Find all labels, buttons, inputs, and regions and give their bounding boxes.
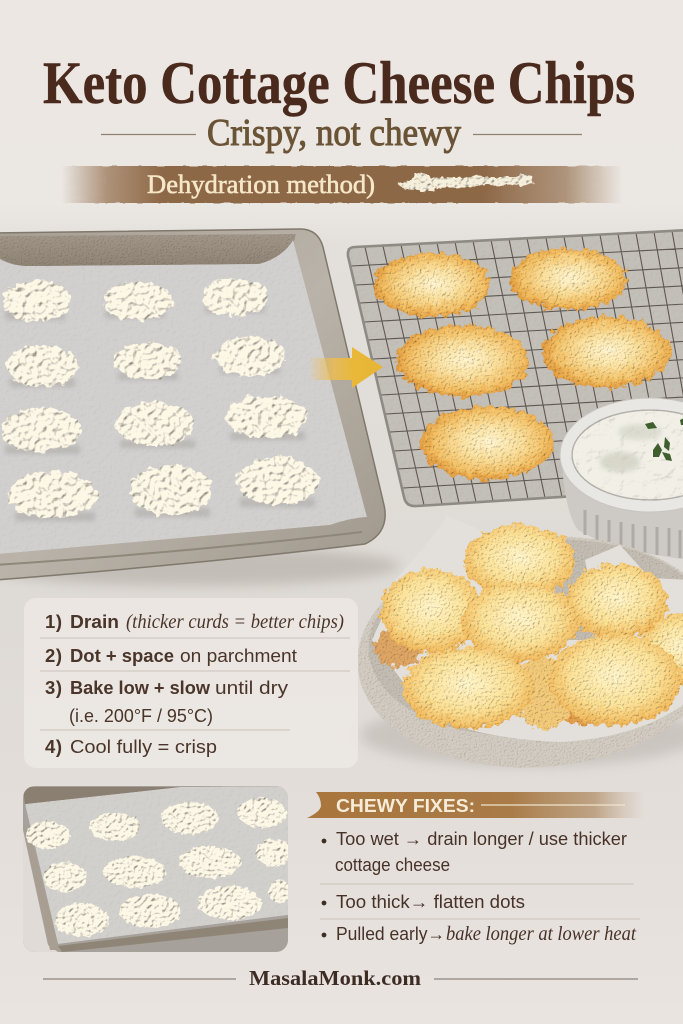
step 3 <box>45 677 289 726</box>
chip 1 <box>373 253 491 317</box>
ribbon heading: CHEWY FIXES: <box>336 796 475 816</box>
curds <box>3 281 71 321</box>
step 3: Bake low + slow <box>70 677 211 698</box>
icon: cheese strip <box>397 173 533 192</box>
step 3: until dry <box>215 677 289 698</box>
step 1: (thicker curds = better chips) <box>126 611 344 633</box>
tray frame <box>0 229 385 580</box>
baking tray with raw cottage cheese dots <box>0 229 400 586</box>
step 2: on parchment <box>180 645 297 666</box>
plate of chips <box>348 516 683 783</box>
ramekin body <box>562 465 683 560</box>
panel: steps <box>24 598 358 768</box>
chip 4 <box>542 316 670 388</box>
fix 2: Too thick→ flatten dots <box>336 892 525 912</box>
method band: Dehydration method) <box>147 170 375 199</box>
step 1: 1) <box>45 611 62 632</box>
step 2 <box>45 645 297 666</box>
parchment sheet <box>0 240 367 554</box>
step 4: 4) <box>45 736 62 757</box>
fix 1: Too wet → drain longer / use thicker <box>336 829 627 849</box>
ramekin of dip <box>560 398 683 560</box>
fix 3 <box>322 923 636 945</box>
chip 2 <box>509 248 627 310</box>
plate inner <box>360 525 683 751</box>
step 3: (i.e. 200°F / 95°C) <box>69 705 213 726</box>
thumbnail curds <box>26 821 70 849</box>
step 2: 2) <box>45 645 62 666</box>
parchment liner <box>372 516 683 742</box>
step 2: Dot + space <box>70 645 174 666</box>
dip <box>572 410 683 500</box>
chip 3 <box>396 325 530 397</box>
fix 3: bake longer at lower heat <box>446 923 636 945</box>
fix 3: Pulled early→ <box>336 924 445 944</box>
step 4: Cool fully = crisp <box>70 736 217 757</box>
plate rim <box>348 521 683 783</box>
step 1: Drain <box>70 611 119 632</box>
stacked chips <box>374 629 422 667</box>
method band <box>62 166 622 203</box>
step 3: 3) <box>45 677 62 698</box>
arrow from raw to baked <box>308 347 383 388</box>
ribbon heading <box>307 792 645 818</box>
panel: chewy fixes <box>307 792 645 945</box>
rack wires <box>351 231 683 505</box>
thumbnail parchment <box>25 786 288 944</box>
chip 5 <box>420 406 554 480</box>
subtitle with rules: Crispy, not chewy <box>207 112 461 154</box>
fix 1: cottage cheese <box>335 855 450 875</box>
thumbnail: tray after baking prep <box>23 786 291 952</box>
fix 1 <box>322 829 627 875</box>
ramekin rim <box>560 398 683 512</box>
footer: website: MasalaMonk.com <box>249 966 422 990</box>
rack shadowed floor <box>347 231 683 506</box>
tray lip <box>0 234 296 267</box>
step 1 <box>45 611 344 633</box>
cooling rack with baked chips <box>347 230 683 506</box>
herbs <box>645 418 683 461</box>
pile shadows <box>5 305 315 521</box>
